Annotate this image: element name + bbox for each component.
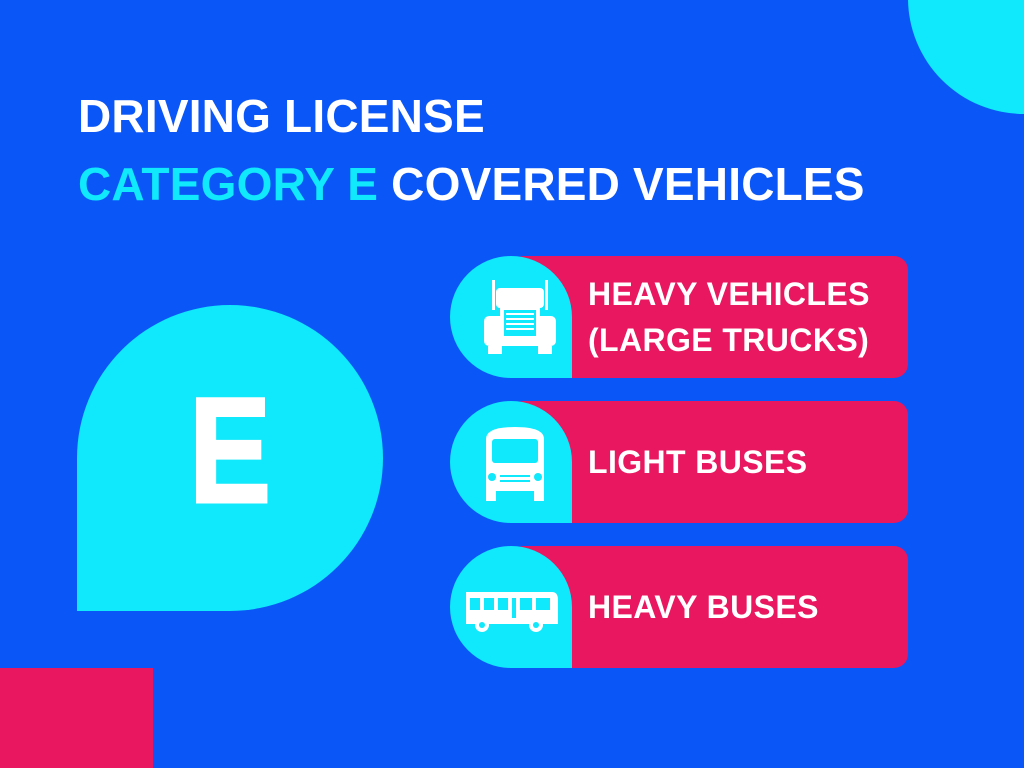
item: heavy buses bbox=[450, 546, 908, 668]
label: (LARGE TRUCKS) bbox=[588, 322, 869, 358]
badge letter: E bbox=[189, 366, 271, 534]
decoration: cyan corner circle bbox=[908, 0, 1024, 114]
decoration: pink corner square bbox=[0, 668, 153, 768]
label: LIGHT BUSES bbox=[588, 444, 808, 480]
icon: heavy bus bbox=[466, 592, 558, 632]
title bbox=[78, 90, 865, 210]
item: light buses bbox=[450, 401, 908, 523]
label: HEAVY BUSES bbox=[588, 589, 819, 625]
title line 2: CATEGORY E COVERED VEHICLES bbox=[78, 158, 865, 210]
label bbox=[588, 276, 870, 358]
label: HEAVY VEHICLES bbox=[588, 276, 870, 312]
icon: light bus bbox=[486, 427, 544, 501]
badge: E bbox=[77, 305, 383, 611]
icon: truck bbox=[484, 280, 556, 354]
item: heavy vehicles bbox=[450, 256, 908, 378]
title line 1: DRIVING LICENSE bbox=[78, 90, 485, 142]
